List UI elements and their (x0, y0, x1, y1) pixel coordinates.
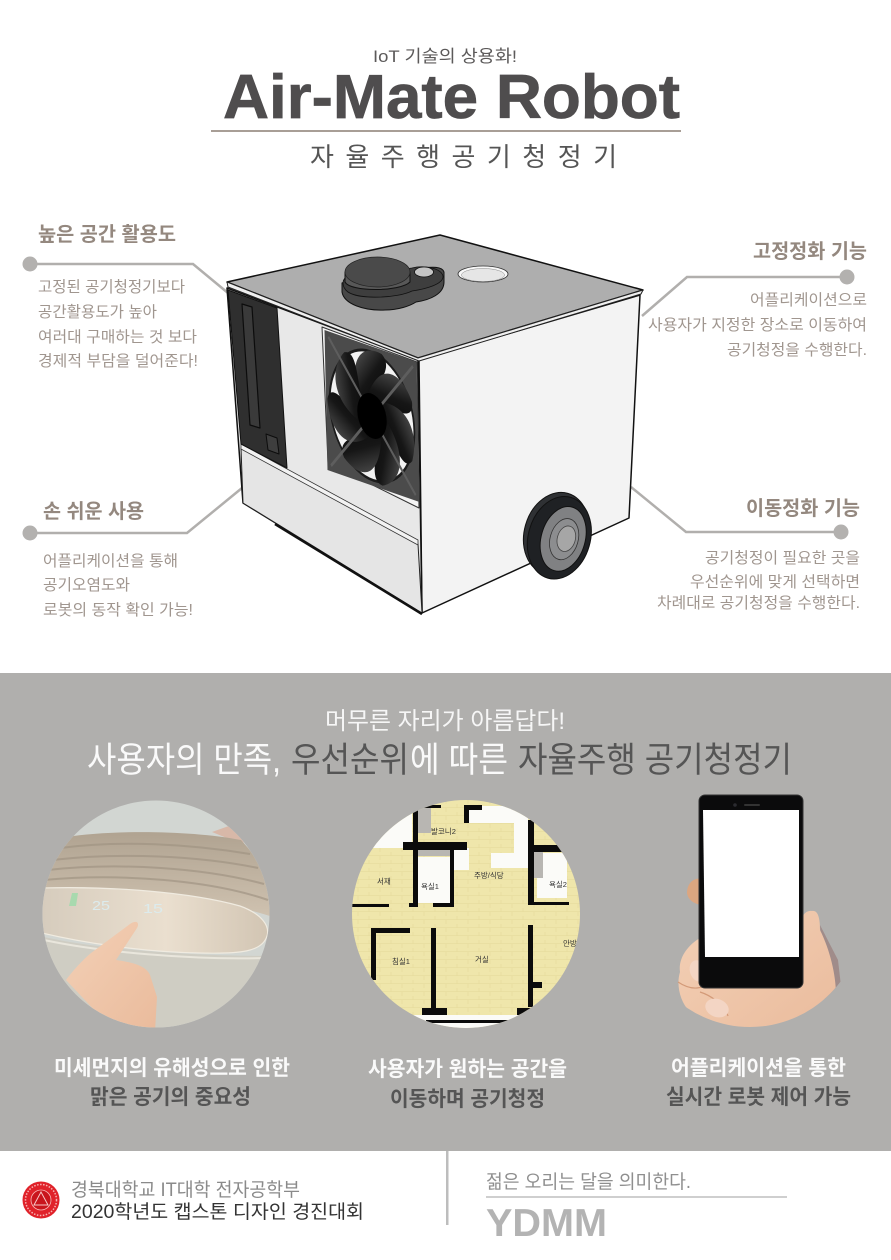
callout body: 고정된 공기청정기보다 (38, 278, 185, 296)
fan body (324, 330, 420, 503)
callout body: 어플리케이션을 통해 (43, 552, 178, 570)
callout body: 우선순위에 맞게 선택하면 (690, 573, 860, 591)
wheel back tyre (514, 485, 599, 583)
hole centre (462, 268, 504, 282)
contest text: 2020학년도 캡스톤 디자인 경진대회 (71, 1201, 364, 1223)
callout heading: 손 쉬운 사용 (43, 500, 144, 523)
wheel hub (533, 501, 593, 577)
callout body: 공기청정이 필요한 곳을 (705, 549, 860, 567)
photo: air purifier control panel (40, 798, 272, 1032)
callout body (648, 291, 867, 359)
connector dot (22, 526, 38, 540)
button (266, 434, 279, 454)
dark panel (228, 290, 287, 468)
room labels: 주방/식당 (474, 870, 504, 880)
wheel inner ring (545, 515, 583, 563)
eyebrow text: IoT 기술의 상용화! (373, 47, 517, 66)
wheel front tyre (518, 489, 601, 587)
subtitle: 자율주행공기청정기 (310, 142, 617, 172)
caption 1 (54, 1057, 290, 1109)
lidar sensor (342, 257, 444, 310)
callout: moving cleaning (631, 487, 860, 612)
finger crease (678, 982, 728, 1016)
connector line (30, 264, 228, 293)
caption 2: 이동하며 공기청정 (390, 1088, 545, 1111)
status display (69, 893, 162, 913)
callout heading: 이동정화 기능 (746, 497, 860, 520)
callout body: 여러대 구매하는 것 보다 (38, 328, 197, 346)
callout heading: 고정정화 기능 (753, 240, 867, 263)
caption 3 (666, 1057, 851, 1109)
panel digit left: 25 (92, 898, 110, 913)
caption 3: 실시간 로봇 제어 가능 (666, 1086, 851, 1109)
photo background (40, 798, 272, 1030)
caption 2 (368, 1058, 567, 1111)
walls (350, 805, 569, 1023)
team name: YDMM (486, 1202, 607, 1245)
control panel surface (42, 888, 268, 953)
fan (322, 327, 420, 508)
hand (66, 922, 157, 1032)
hand shadow (820, 926, 840, 998)
ribbed top (42, 832, 270, 916)
highlight strip (44, 940, 266, 958)
callout: high space usage (22, 223, 228, 370)
robot 3D illustration (227, 235, 643, 614)
callout body: 공기오염도와 (43, 576, 130, 594)
callout heading: 높은 공간 활용도 (38, 223, 176, 246)
connector dot (834, 524, 848, 540)
top plate edge (227, 282, 643, 361)
department text: 경북대학교 IT대학 전자공학부 (71, 1179, 300, 1201)
phone body (699, 795, 803, 988)
callout body (657, 549, 860, 612)
room labels: 욕실2 (549, 879, 567, 889)
section headline: 자율주행 공기청정기 (518, 741, 792, 780)
lidar pin (414, 267, 434, 277)
photo: phone in hand (678, 795, 842, 1035)
lidar cylinder top (345, 257, 410, 287)
green indicator (69, 893, 78, 906)
caption 2: 사용자가 원하는 공간을 (368, 1058, 567, 1081)
callout body: 차례대로 공기청정을 수행한다. (657, 594, 860, 612)
lidar base top (343, 267, 443, 297)
seam (241, 444, 418, 545)
grey fixtures (416, 808, 543, 878)
pink corner (212, 826, 244, 842)
upper finger (687, 878, 698, 904)
section heading (87, 708, 792, 780)
connector line (642, 277, 847, 316)
section headline (87, 741, 792, 780)
room labels: 안방 (563, 938, 577, 948)
grey section background (0, 673, 891, 1151)
callout: fixed-point cleaning (642, 240, 867, 359)
caption 1: 미세먼지의 유해성으로 인한 (54, 1057, 290, 1080)
left face (227, 288, 422, 613)
connector dot (22, 256, 38, 272)
panel digit right: 15 (143, 901, 163, 916)
main title: Air-Mate Robot (223, 63, 680, 132)
lower left panel (241, 448, 422, 613)
base shadow line (275, 524, 422, 614)
callout body: 공간활용도가 높아 (38, 303, 157, 321)
hole ring (458, 266, 508, 282)
speaker (744, 804, 760, 806)
callout body: 공기청정을 수행한다. (727, 341, 867, 359)
room labels: 서재 (377, 877, 391, 886)
callout body: 경제적 부담을 덜어준다! (38, 352, 198, 370)
wheel axle (554, 524, 579, 554)
lidar cylinder side (345, 272, 410, 290)
university emblem (22, 1182, 60, 1218)
team motto: 젊은 오리는 달을 의미한다. (486, 1171, 691, 1193)
finger nail 1 (690, 960, 698, 982)
callout body: 사용자가 지정한 장소로 이동하여 (648, 316, 867, 334)
title underline (211, 130, 681, 132)
connector line (631, 487, 841, 532)
motto underline (486, 1196, 787, 1198)
control panel (228, 290, 287, 468)
phone screen (703, 810, 799, 957)
footer left (22, 1179, 364, 1223)
finger nail 2 (705, 998, 729, 1018)
caption 3: 어플리케이션을 통한 (671, 1057, 846, 1080)
top plate (227, 235, 643, 358)
room labels: 침실1 (392, 956, 410, 966)
photo: floor plan (350, 798, 584, 1033)
camera (733, 803, 737, 807)
wheel (513, 485, 602, 587)
callout body (38, 278, 198, 370)
slot (242, 304, 260, 428)
panel lower body (45, 938, 261, 1028)
room labels: 욕실1 (421, 881, 439, 891)
title block (211, 47, 681, 172)
room labels: 발코니2 (431, 827, 456, 836)
fan frame (322, 327, 419, 508)
footer divider (446, 1151, 448, 1225)
connector line (30, 488, 242, 533)
callout body: 어플리케이션으로 (750, 291, 867, 309)
section eyebrow: 머무른 자리가 아름답다! (325, 708, 565, 735)
connector dot (840, 270, 854, 284)
caption 1: 맑은 공기의 중요성 (90, 1086, 251, 1109)
section headline: 사용자의 만족, (87, 741, 281, 780)
hand (678, 879, 842, 1035)
palm and thumb (678, 911, 836, 1035)
callout body (43, 552, 193, 619)
floor (350, 798, 584, 1032)
vent hole (458, 266, 508, 282)
section headline: 에 따른 (410, 741, 508, 780)
right face (419, 295, 640, 613)
room labels: 거실 (475, 954, 489, 964)
callout: easy use (22, 488, 242, 619)
room labels (377, 827, 577, 966)
section headline: 우선순위 (291, 741, 409, 780)
lidar base side (342, 267, 444, 310)
ribs (44, 844, 268, 900)
callout body: 로봇의 동작 확인 가능! (43, 601, 193, 619)
white zones (373, 806, 567, 1028)
footer right (486, 1171, 787, 1245)
